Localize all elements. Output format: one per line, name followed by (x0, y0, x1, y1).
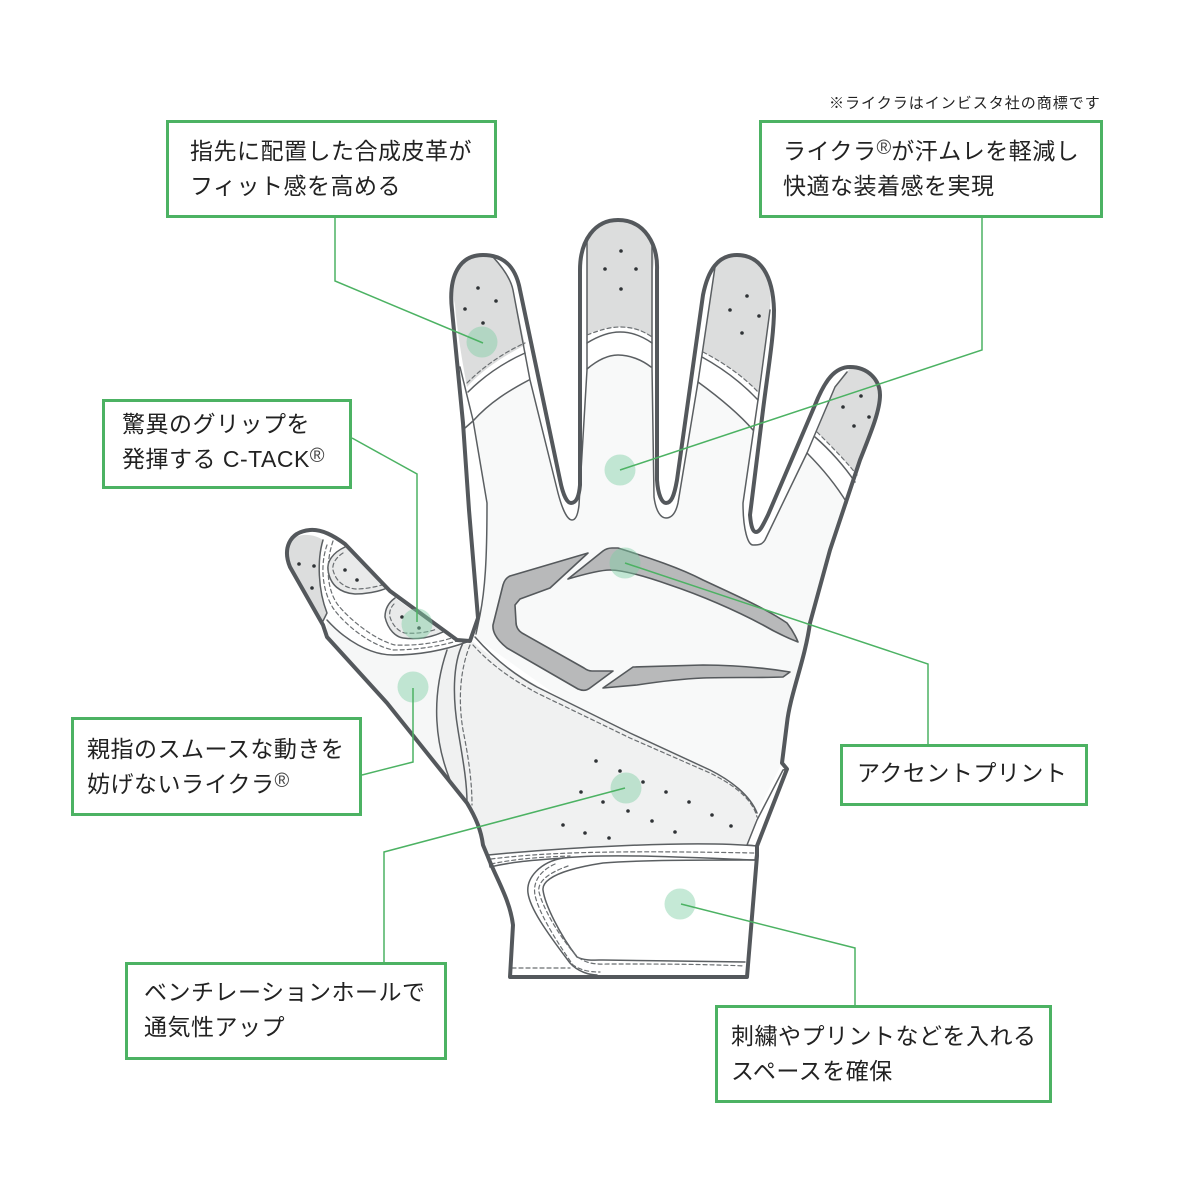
trademark note: ※ライクラはインビスタ社の商標です (829, 95, 1101, 112)
wrist cuff and strap (488, 844, 757, 975)
callout text: fingertip: フィット感を高める (190, 173, 401, 199)
lower palm panel (436, 642, 757, 857)
callout marker dots (398, 326, 696, 920)
wrist side strip (747, 769, 787, 846)
callout text: embroidery space: 刺繍やプリントなどを入れる (731, 1023, 1036, 1049)
callout: C-TACK grip (102, 399, 352, 489)
callout text: embroidery space (731, 1023, 1036, 1084)
callout text: thumb Lycra: 親指のスムースな動きを (87, 736, 344, 762)
callout text: ventilation: ベンチレーションホールで (144, 979, 426, 1005)
thumb base panel (327, 620, 467, 780)
callout text: C-TACK grip: 驚異のグリップを (122, 411, 310, 437)
callout text: thumb Lycra: 妨げないライクラ® (87, 770, 289, 797)
callout: Lycra sweat (759, 120, 1103, 218)
callout leader lines (335, 218, 982, 1005)
glove thin seam lines (319, 237, 855, 813)
callout text: fingertip: 指先に配置した合成皮革が (190, 138, 472, 164)
callout text: thumb Lycra (87, 736, 344, 797)
callout text: ventilation: 通気性アップ (144, 1014, 285, 1040)
vent and finger perforation dots (297, 249, 871, 840)
callout: thumb Lycra (71, 717, 362, 816)
callout text: C-TACK grip: 発揮する C-TACK® (122, 445, 325, 472)
callout: fingertip synthetic leather (166, 120, 497, 218)
callout: embroidery space (715, 1005, 1052, 1103)
fingertip panels (287, 220, 880, 639)
callout text: C-TACK grip (122, 411, 325, 472)
callout: accent print (840, 744, 1088, 806)
callout text: fingertip (190, 138, 472, 199)
callout text: Lycra sweat: ライクラ®が汗ムレを軽減し (783, 137, 1079, 164)
glove base silhouette (287, 220, 880, 977)
callout text: embroidery space: スペースを確保 (731, 1058, 893, 1084)
callout text: ventilation (144, 979, 426, 1040)
callout text: Lycra sweat: 快適な装着感を実現 (783, 173, 994, 199)
glove outer outline (287, 220, 880, 977)
palm panel (473, 355, 847, 813)
callout text: accent print: アクセントプリント (857, 760, 1067, 786)
accent print shapes (493, 548, 798, 690)
callout text: Lycra sweat (783, 137, 1079, 199)
callout: ventilation (125, 962, 447, 1060)
glove dashed stitching (323, 327, 857, 817)
